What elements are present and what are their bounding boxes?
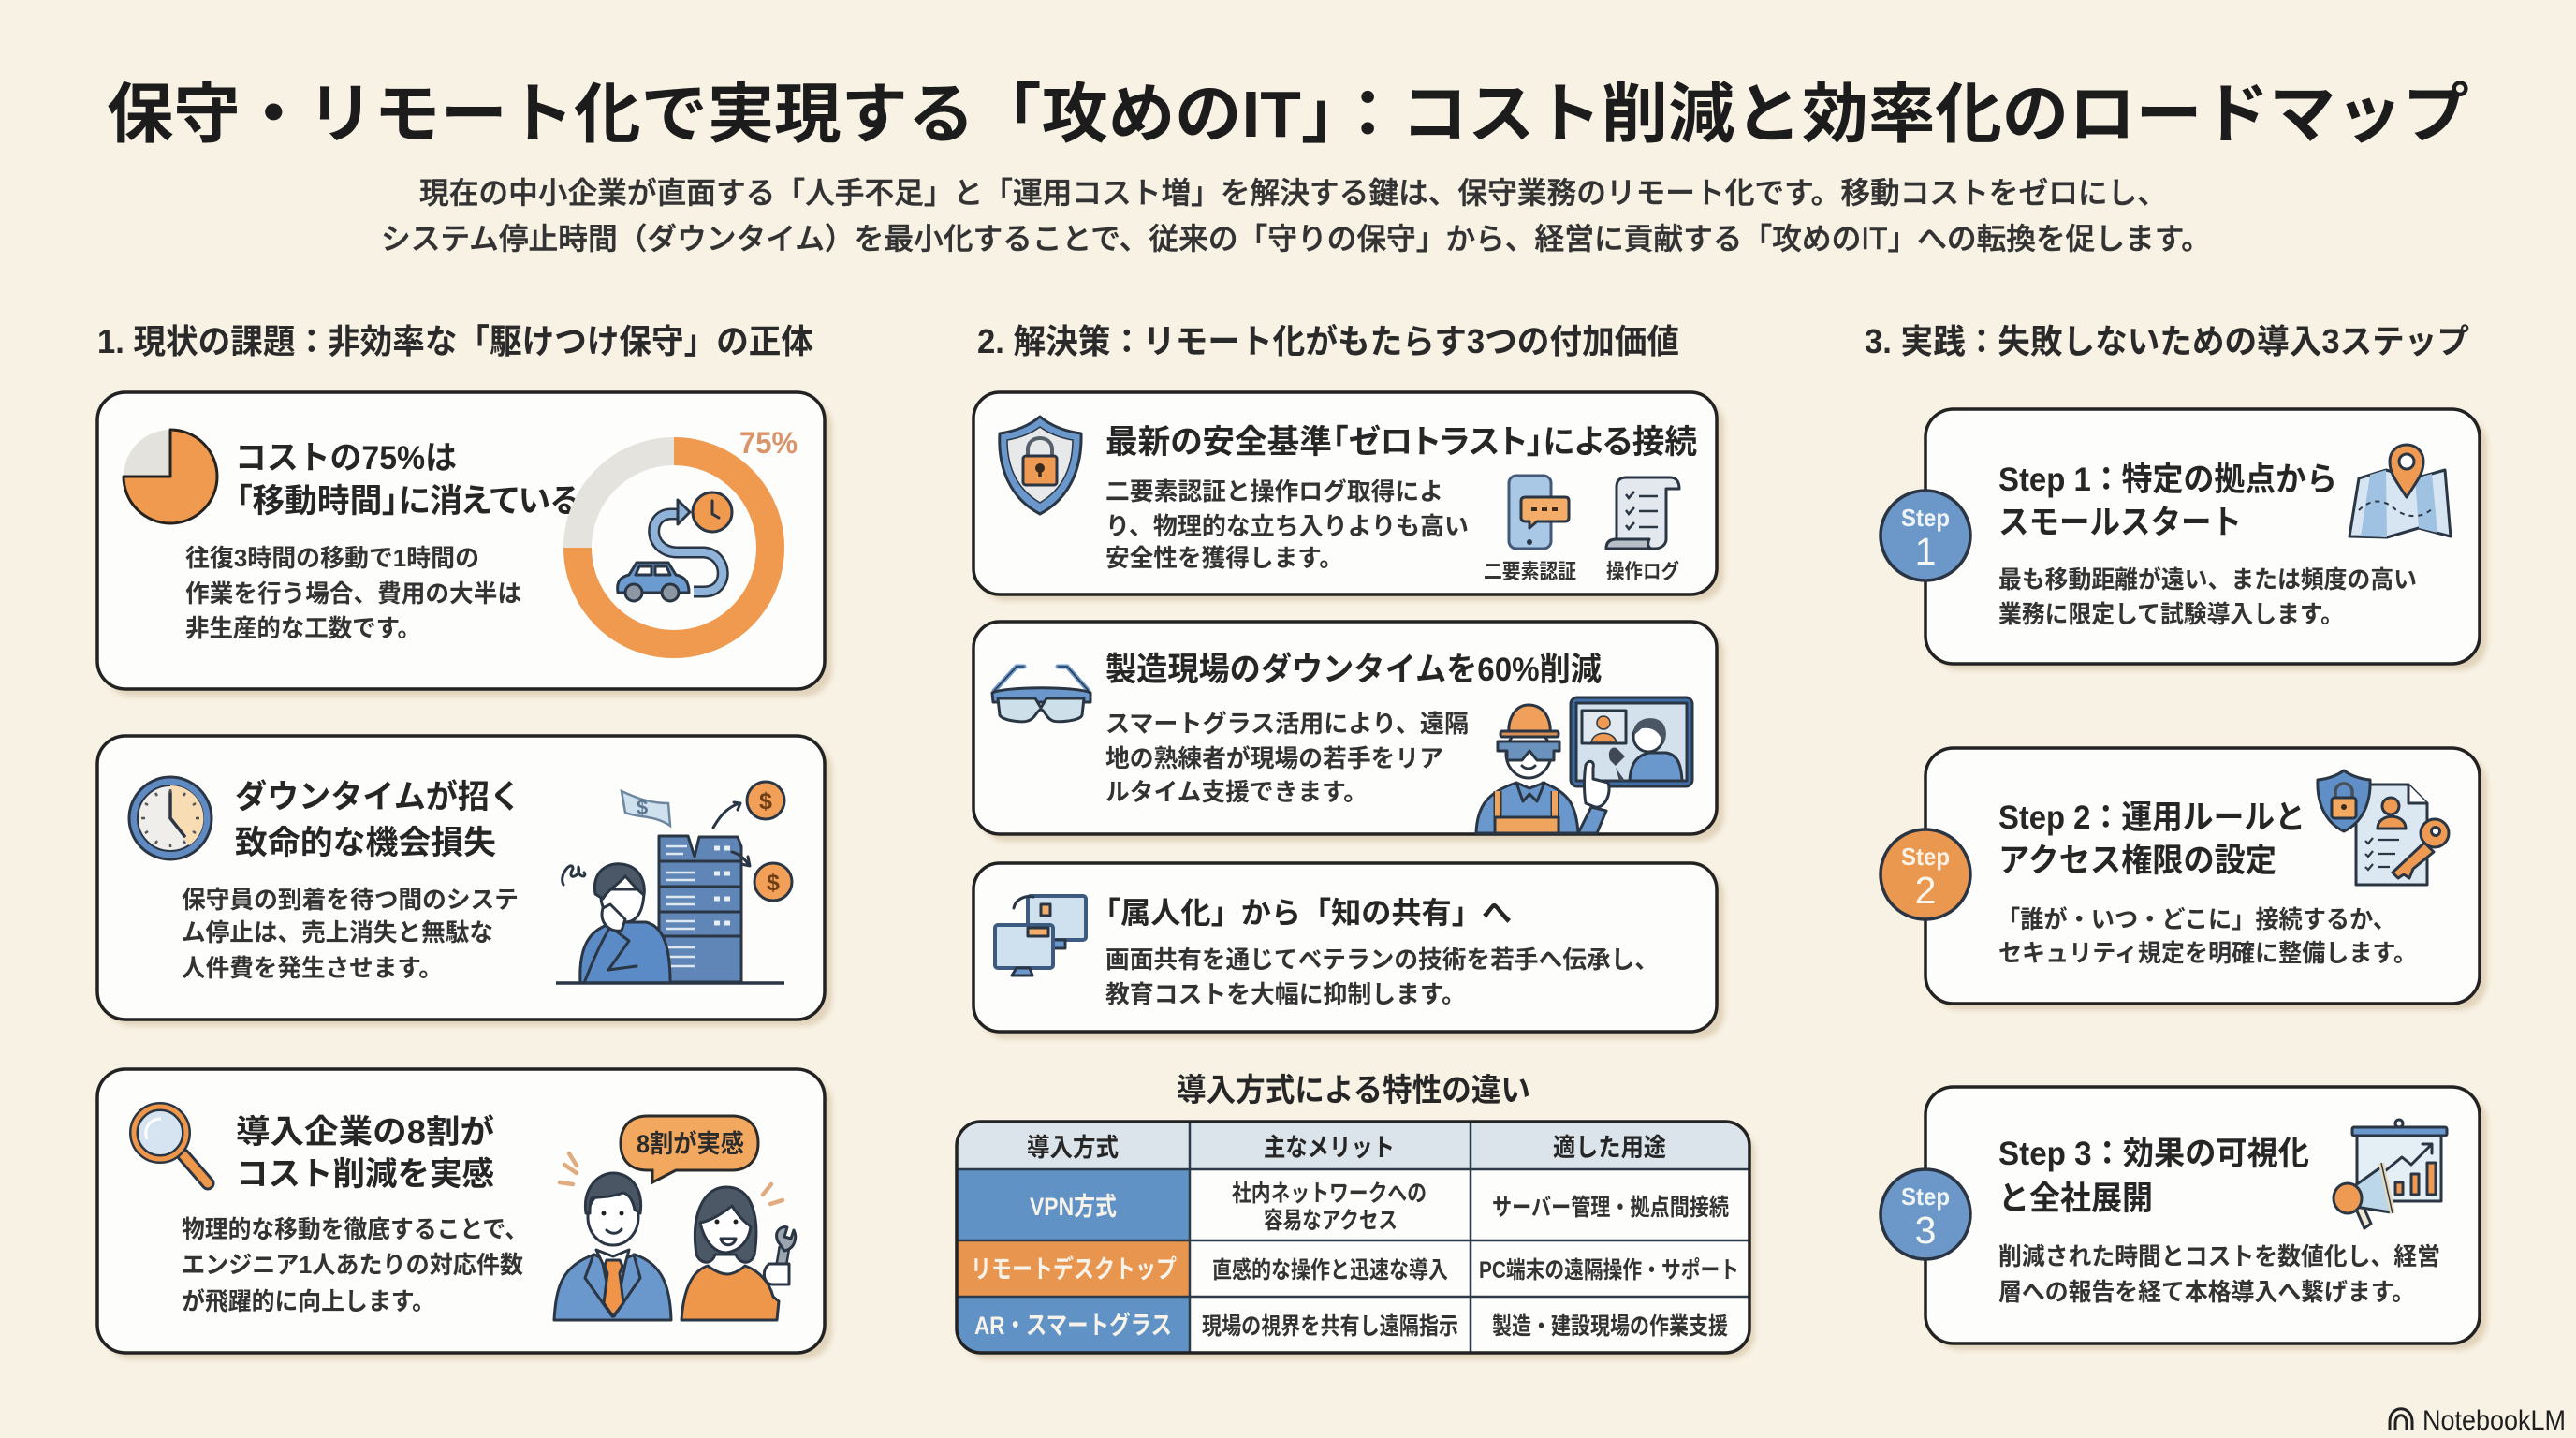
- card body text: [185, 544, 521, 642]
- card body text: 作業を行う場合、費用の大半は: [185, 580, 521, 608]
- card body text: 層への報告を経て本格導入へ繋げます。: [1998, 1278, 2415, 1306]
- card heading: 製造現場のダウンタイムを60%削減: [1105, 651, 1602, 688]
- badge: step 2: Step: [1901, 843, 1950, 871]
- table row: remote desktop: [957, 1240, 1739, 1297]
- table row: remote desktop: リモートデスクトップ: [971, 1255, 1177, 1284]
- heading: section 1: 1. 現状の課題：非効率な「駆けつけ保守」の正体: [97, 322, 813, 360]
- card body text: [1105, 946, 1659, 1008]
- card body text: り、物理的な立ち入りよりも高い: [1105, 512, 1469, 540]
- card body text: ム停止は、売上消失と無駄な: [182, 918, 493, 946]
- card body text: [182, 1215, 528, 1315]
- card body text: 画面共有を通じてベテランの技術を若手へ伝承し、: [1105, 946, 1659, 974]
- card heading: アクセス権限の設定: [1998, 843, 2276, 879]
- card body text: 往復3時間の移動で1時間の: [185, 544, 479, 572]
- card body text: [1105, 710, 1469, 806]
- card heading: Step 1：特定の拠点から: [1998, 462, 2337, 498]
- card heading: と全社展開: [1998, 1181, 2153, 1217]
- card heading: 「移動時間」に消えている: [236, 483, 580, 520]
- table row: remote desktop: PC端末の遠隔操作・サポート: [1479, 1257, 1739, 1284]
- panel: smart glasses: [973, 622, 1724, 842]
- title: 保守・リモート化で実現する「攻めのIT」：コスト削減と効率化のロードマップ: [107, 78, 2469, 151]
- table row: remote desktop: 直感的な操作と迅速な導入: [1212, 1257, 1448, 1284]
- icon: two-factor phone: 二要素認証: [1484, 560, 1576, 583]
- card heading: ダウンタイムが招く: [235, 778, 521, 815]
- card body text: 人件費を発生させます。: [182, 954, 443, 982]
- illustration: worried person with server and money: $: [759, 788, 772, 814]
- card heading: [1998, 800, 2305, 879]
- heading: section 2: 2. 解決策：リモート化がもたらす3つの付加価値: [977, 322, 1679, 360]
- card heading: Step 3：効果の可視化: [1998, 1136, 2309, 1172]
- card body text: スマートグラス活用により、遠隔: [1105, 710, 1469, 738]
- card body text: [1998, 565, 2417, 628]
- card body text: ルタイム支援できます。: [1105, 778, 1368, 806]
- intro text: 現在の中小企業が直面する「人手不足」と「運用コスト増」を解決する鍵は、保守業務のリモート化です。移動コストをゼロにし、: [419, 176, 2167, 210]
- table row: AR smart glasses: AR・スマートグラス: [974, 1311, 1172, 1340]
- icon: pie chart: [124, 430, 217, 523]
- heading: comparison table: 導入方式による特性の違い: [1177, 1073, 1530, 1108]
- card body text: セキュリティ規定を明確に整備します。: [1998, 939, 2417, 967]
- card body text: 保守員の到着を待つ間のシステ: [182, 886, 519, 914]
- card body text: エンジニア1人あたりの対応件数: [182, 1251, 523, 1279]
- card body text: 教育コストを大幅に抑制します。: [1105, 980, 1466, 1008]
- card heading: [1998, 462, 2337, 541]
- badge: step 1: 1: [1915, 530, 1936, 573]
- card body text: 業務に限定して試験導入します。: [1998, 600, 2344, 628]
- icon: smart glasses: [992, 667, 1090, 722]
- badge: step 2: [1881, 829, 1970, 919]
- icon: shield with lock: [1000, 417, 1081, 514]
- panel: zero trust: [973, 392, 1724, 601]
- table row: VPN: VPN方式: [1030, 1193, 1117, 1221]
- table row: VPN: 容易なアクセス: [1264, 1208, 1398, 1234]
- card body text: 安全性を獲得します。: [1105, 544, 1343, 572]
- card body text: 物理的な移動を徹底することで、: [182, 1215, 528, 1243]
- card body text: 削減された時間とコストを数値化し、経営: [1998, 1242, 2440, 1270]
- table row: AR smart glasses: [957, 1297, 1728, 1353]
- badge: step 1: Step: [1901, 504, 1950, 532]
- card body text: [1998, 1242, 2440, 1306]
- icon: clock: [129, 777, 212, 859]
- card body text: [1105, 477, 1469, 572]
- badge: step 3: Step: [1901, 1182, 1950, 1211]
- icon: access document, shield and key: [2318, 770, 2449, 885]
- card body text: 地の熟練者が現場の若手をリア: [1105, 744, 1443, 772]
- icon: presentation board with megaphone: [2334, 1120, 2447, 1228]
- card heading: スモールスタート: [1998, 505, 2242, 541]
- badge: step 3: 3: [1915, 1209, 1936, 1252]
- icon: map with pin: [2349, 445, 2451, 537]
- icon: operation log: [1606, 477, 1679, 583]
- heading: section 3: 3. 実践：失敗しないための導入3ステップ: [1865, 322, 2469, 360]
- illustration: worried person with server and money: $: [637, 796, 648, 819]
- card body text: 二要素認証と操作ログ取得によ: [1105, 477, 1443, 506]
- card heading: [235, 778, 521, 861]
- illustration: worried person with server and money: $: [767, 870, 780, 896]
- panel: knowledge sharing: [973, 863, 1724, 1039]
- chart: 75 percent donut: 75%: [739, 426, 798, 460]
- card body text: 「誰が・いつ・どこに」接続するか、: [1997, 905, 2396, 933]
- panel: travel cost: [97, 392, 832, 697]
- table row: AR smart glasses: 製造・建設現場の作業支援: [1492, 1313, 1728, 1340]
- badge: step 1: [1881, 491, 1970, 580]
- card heading: コスト削減を実感: [236, 1156, 494, 1193]
- table header row: [957, 1122, 1749, 1169]
- card heading: [1998, 1136, 2309, 1217]
- card heading: 導入企業の8割が: [236, 1114, 494, 1151]
- icon: operation log: 操作ログ: [1606, 560, 1679, 583]
- icon: two-factor phone: [1484, 476, 1576, 583]
- icon: magnifier: [134, 1107, 208, 1183]
- card body text: [1997, 905, 2417, 967]
- panel: downtime loss: [97, 736, 832, 1026]
- card body text: 非生産的な工数です。: [185, 614, 421, 642]
- table row: AR smart glasses: 現場の視界を共有し遠隔指示: [1202, 1313, 1458, 1340]
- chart: 75 percent donut: [578, 426, 798, 644]
- card heading: コストの75%は: [235, 440, 457, 477]
- card heading: 「属人化」から「知の共有」へ: [1090, 896, 1512, 930]
- table row: VPN: 社内ネットワークへの: [1232, 1181, 1427, 1207]
- panel: step 3: [1881, 1087, 2487, 1350]
- table row: VPN: [957, 1169, 1729, 1240]
- card heading: 最新の安全基準「ゼロトラスト」による接続: [1105, 424, 1697, 461]
- illustration: worker and remote expert tablet: [1476, 697, 1692, 833]
- icon: shared monitors: [995, 896, 1086, 976]
- panel: step 2: [1881, 748, 2487, 1010]
- card heading: 致命的な機会損失: [235, 825, 496, 861]
- panel: cost reduction result: [97, 1069, 832, 1359]
- panel: step 1: [1881, 409, 2487, 670]
- intro text: [381, 176, 2211, 256]
- card body text: が飛躍的に向上します。: [182, 1287, 435, 1315]
- comparison table: [957, 1122, 1755, 1359]
- speech bubble: [621, 1116, 758, 1182]
- icon: car route and clock: [618, 492, 732, 601]
- card heading: [235, 440, 580, 520]
- table header row: 主なメリット: [1264, 1134, 1395, 1162]
- badge: step 3: [1881, 1169, 1970, 1259]
- table row: VPN: サーバー管理・拠点間接続: [1492, 1195, 1729, 1221]
- table header row: 適した用途: [1553, 1134, 1666, 1162]
- table header row: 導入方式: [1027, 1134, 1119, 1162]
- illustration: man and woman with wrench: [554, 1153, 796, 1320]
- speech bubble: 8割が実感: [637, 1129, 744, 1158]
- badge: step 2: 2: [1915, 869, 1936, 912]
- card body text: 最も移動距離が遠い、または頻度の高い: [1998, 565, 2417, 594]
- intro text: システム停止時間（ダウンタイム）を最小化することで、従来の「守りの保守」から、経営に貢献する「攻めのIT」への転換を促します。: [381, 222, 2211, 256]
- illustration: worried person with server and money: [556, 782, 792, 983]
- card body text: [182, 886, 519, 982]
- card heading: [236, 1114, 494, 1193]
- card heading: Step 2：運用ルールと: [1998, 800, 2305, 836]
